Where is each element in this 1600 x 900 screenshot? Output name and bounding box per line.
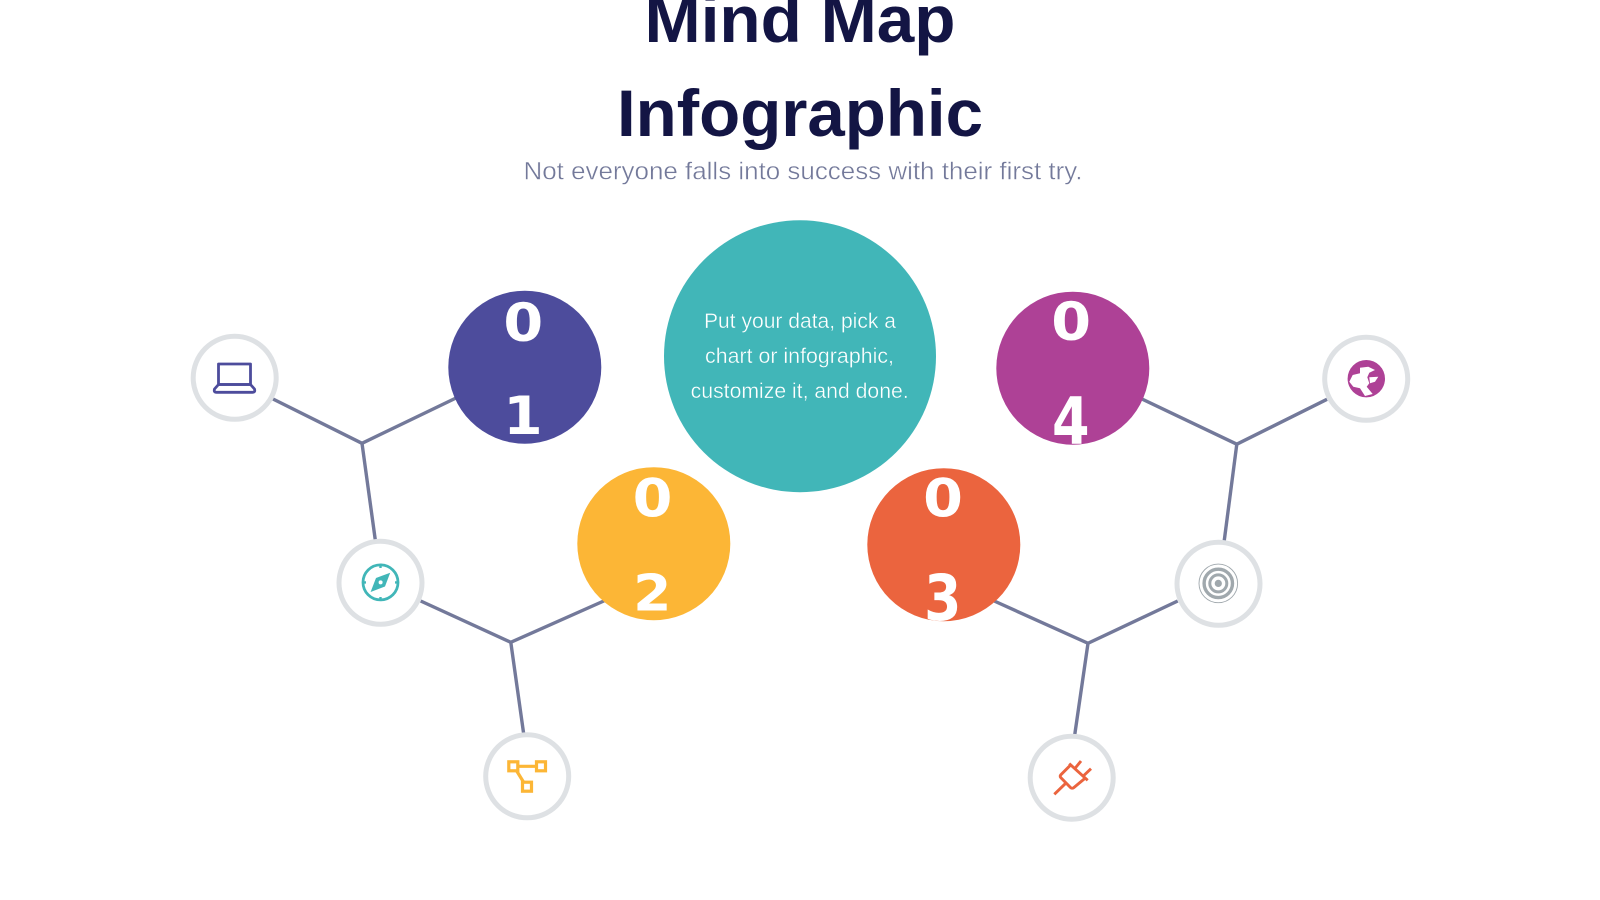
central circle with text	[664, 220, 936, 492]
connector: branch 04	[1142, 399, 1327, 544]
node 02	[577, 467, 730, 623]
node 01	[448, 291, 601, 447]
connector: branch 02	[421, 600, 606, 734]
icon: target	[1199, 564, 1238, 603]
icon node: network	[486, 735, 569, 818]
icon node: plug	[1030, 736, 1113, 819]
node 03	[867, 468, 1020, 635]
icon node: laptop	[193, 336, 276, 419]
node 04: 4	[1052, 385, 1090, 460]
node 04: 0	[1051, 292, 1091, 353]
connector: branch 01	[273, 398, 456, 540]
icon node: globe	[1325, 337, 1408, 420]
central circle with text: chart or infographic,	[705, 345, 894, 368]
node 02: 2	[633, 564, 671, 623]
node 02: 0	[633, 469, 672, 530]
icon: network	[509, 762, 546, 791]
node 01: 1	[503, 385, 543, 447]
node 01: 0	[503, 293, 543, 354]
node 03: 3	[924, 562, 961, 635]
icon: plug	[1054, 761, 1091, 794]
node 03: 0	[923, 469, 963, 530]
icon node: target	[1177, 542, 1260, 625]
title	[617, 0, 983, 150]
title: Infographic	[617, 76, 983, 150]
icon: laptop	[214, 364, 255, 392]
connector: branch 03	[992, 600, 1178, 735]
subtitle: Not everyone falls into success with their first try.	[524, 158, 1082, 186]
icon: globe	[1348, 360, 1385, 397]
icon: compass	[363, 565, 398, 600]
central circle with text: customize it, and done.	[691, 380, 909, 403]
icon node: compass	[339, 541, 422, 624]
central circle with text: Put your data, pick a	[704, 310, 896, 333]
node 04	[996, 292, 1149, 460]
